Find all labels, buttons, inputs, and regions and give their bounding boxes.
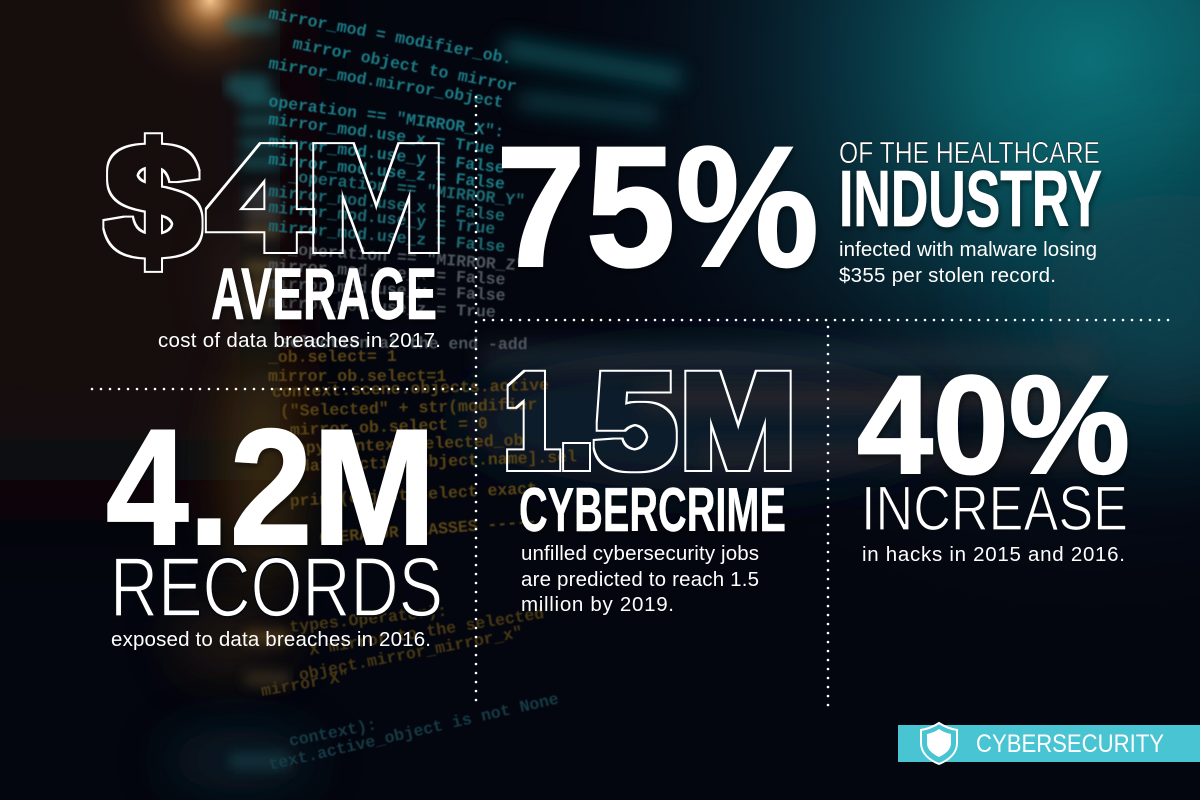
background code text: mirror_ob.select = 0 (290, 414, 488, 440)
stat: 4.2M records (106, 395, 443, 651)
background code text: bpy.context.selected_ob (296, 431, 524, 458)
figure: 1.5M outlined: M (680, 347, 796, 496)
background code text: mirror X" (260, 667, 351, 701)
figure: 1.5M outlined: 5 (593, 347, 677, 496)
figure: $4M outlined: 4 (207, 116, 311, 281)
caption: unfilled cybersecurity jobs: million by 2019. (521, 593, 674, 616)
figure: 75%: 75% (496, 111, 819, 303)
blurred line starts (225, 18, 290, 770)
background code text: data.active_object.name].sel (300, 447, 577, 476)
background code text: OPERATOR CLASSES ----- (319, 512, 538, 548)
background code text: selection at the end -add (280, 333, 528, 354)
badge: cybersecurity (898, 723, 1200, 764)
background code text: context): (287, 715, 378, 751)
figure: 1.5M outlined: 1 (505, 347, 559, 496)
figure: 40%: 40% (857, 346, 1130, 503)
figure: 4.2M: 4.2M (106, 395, 436, 579)
figure: 1.5M outlined (505, 347, 796, 496)
caption: infected with malware (839, 238, 1097, 287)
figure: $4M outlined (105, 111, 446, 290)
figure: $4M outlined: M (306, 116, 446, 281)
background code text: mirror_mod.use_y = True (268, 198, 496, 239)
icon: shield (921, 723, 957, 764)
caption: unfilled cybersecurity jobs (521, 542, 759, 616)
caption: exposed to data breaches: exposed to data breaches in 2016. (111, 628, 431, 651)
text: of the healthcare: OF THE HEALTHCARE (839, 135, 1100, 170)
background code text: X mirror to the selected (308, 604, 545, 660)
background code text: _ob.select= 1 (267, 347, 397, 367)
background code text: mirror_ob.select=1 (268, 367, 446, 386)
heading: RECORDS: RECORDS (110, 540, 443, 634)
caption: cost of data breaches: cost of data breaches in 2017. (158, 329, 441, 352)
background code text: mirror_mod.use_y = False (268, 274, 506, 305)
caption: in hacks: in hacks in 2015 and 2016. (862, 543, 1125, 566)
badge label: CYBERSECURITY (976, 730, 1164, 758)
background code text: mirror object to mirror (291, 34, 518, 96)
stat: 75% healthcare (496, 111, 1102, 303)
background code text: _operation == "MIRROR_Y" (286, 167, 526, 211)
background code text: mirror_mod.use_x = False (267, 182, 506, 226)
background code text: print(object select exact (289, 479, 537, 511)
caption: infected with malware: $355 per stolen record. (839, 264, 1056, 287)
background code text: context.scene.objects.active (272, 376, 549, 402)
background code text: mirror_mod.mirror_object (267, 54, 505, 112)
caption: unfilled cybersecurity jobs: unfilled cybersecurity jobs (521, 542, 759, 565)
dotted dividers (92, 97, 1170, 708)
background code text: mirror_mod.use_x = False (268, 256, 506, 290)
background code text: mirror_mod.use_x = True (267, 110, 496, 159)
heading: CYBERCRIME: CYBERCRIME (519, 476, 786, 545)
stat: 1.5M cybercrime (505, 347, 796, 616)
background code text: mirror_mod.use_z = False (268, 217, 506, 257)
background code text: operation == "MIRROR_X": (267, 92, 505, 142)
background code text: mirror_mod.use_z = False (267, 150, 506, 194)
background code text: object.mirror_mirror_x" (297, 623, 525, 685)
stat: 40% increase (857, 346, 1130, 566)
figure: 1.5M outlined: . (558, 347, 595, 496)
background code text (260, 4, 577, 775)
background code text: ("Selected" + str(modifier (280, 395, 537, 421)
caption: unfilled cybersecurity jobs: are predicted to reach 1.5 (521, 568, 759, 591)
background code text: _operation == "MIRROR_Z" (287, 240, 526, 276)
background code text: mirror_mod.use_z = True (268, 293, 496, 322)
figure: $4M outlined: $ (105, 111, 201, 290)
background code text: types.Operator): (289, 602, 448, 637)
stat: $4M average (105, 111, 446, 352)
background code text: text.active_object is not None (267, 690, 561, 775)
background code text: mirror_mod = modifier_ob. (267, 4, 514, 69)
heading: AVERAGE: AVERAGE (211, 254, 437, 335)
heading: INCREASE: INCREASE (861, 474, 1128, 544)
caption: infected with malware: infected with malware losing (839, 238, 1097, 261)
background code text: mirror_mod.use_y = False (267, 132, 506, 178)
